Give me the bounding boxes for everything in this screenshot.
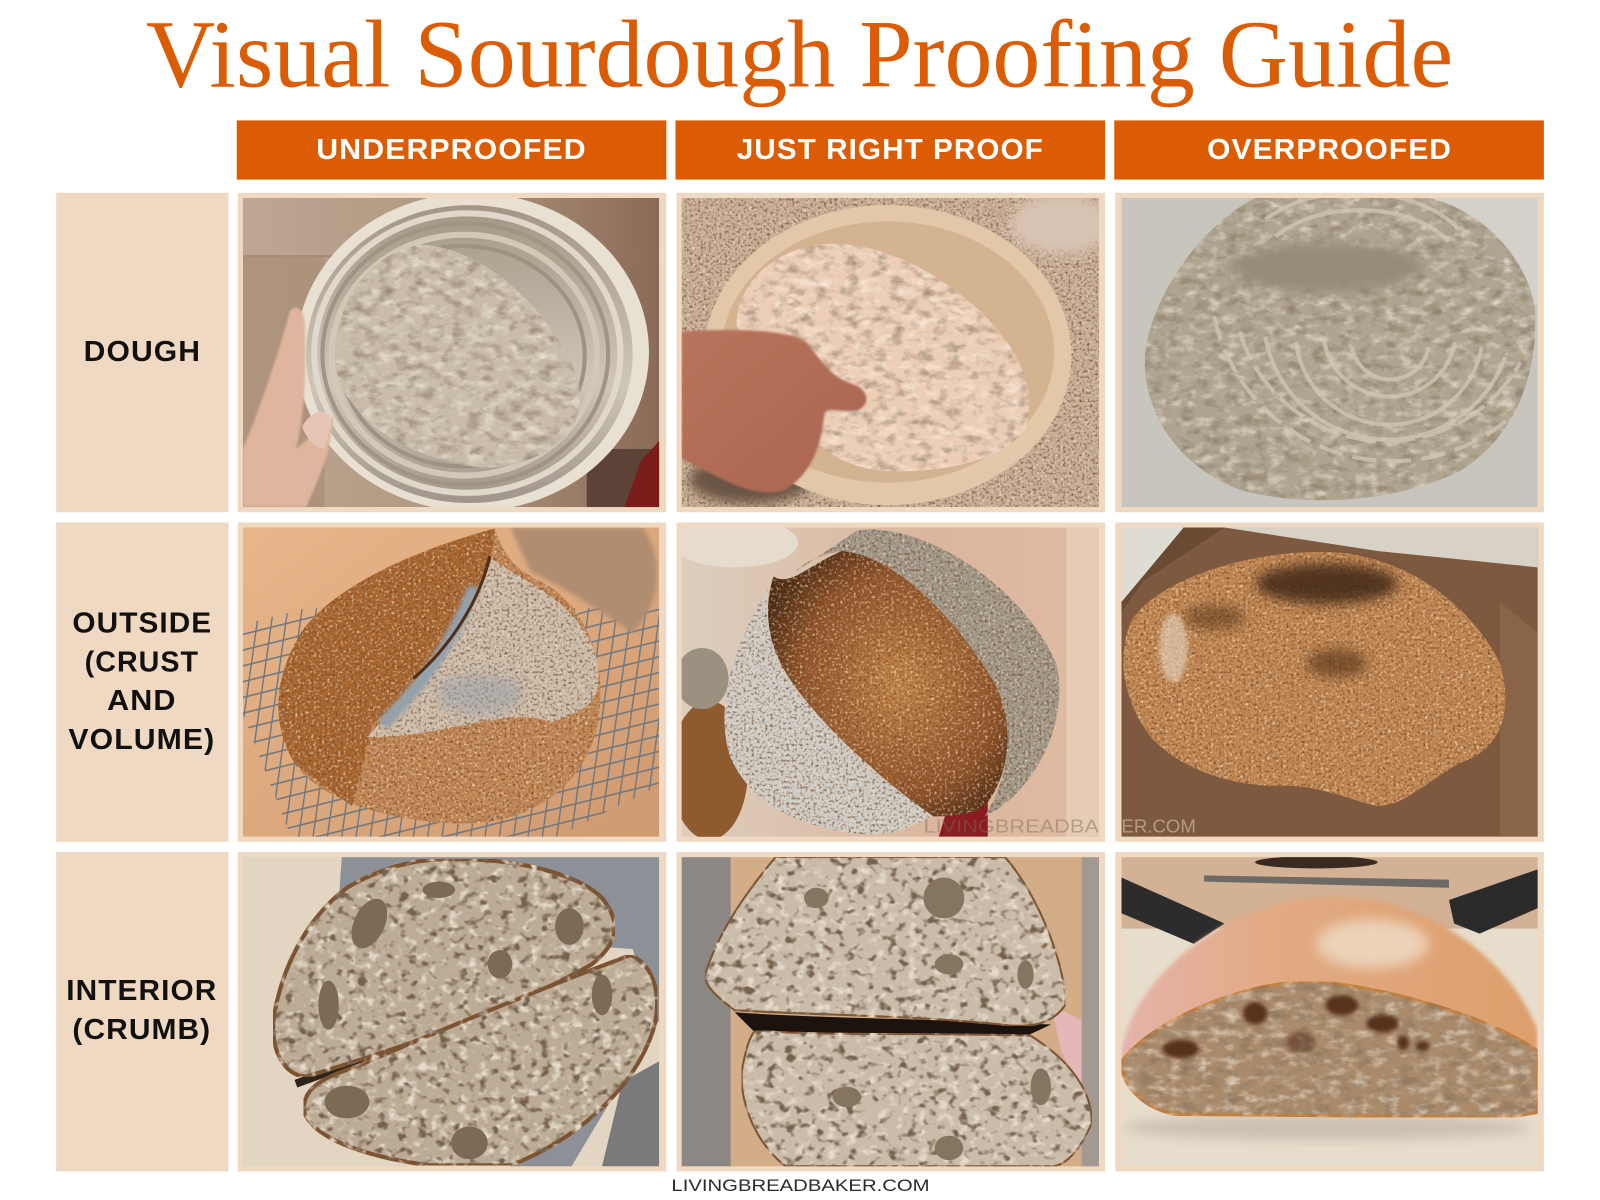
footer: website: LIVINGBREADBAKER.COM [671,1176,930,1195]
photo: underproofed loaf on rack [243,528,659,837]
row label: outside (crust and volume) [56,522,229,842]
photo: overproofed scored dough [1121,192,1538,507]
row label: outside (crust and volume): OUTSIDE [72,608,212,640]
row label: dough [56,193,229,512]
photo: just right crumb, two halves [682,857,1099,1166]
row label: outside (crust and volume): (CRUST [85,646,199,678]
photo frames [238,193,1544,1171]
title: Visual Sourdough Proofing Guide [146,1,1453,108]
watermark: LIVINGBREADBA [923,816,1099,837]
row label: interior (crumb): (CRUMB) [72,1014,211,1046]
header: just right proof [676,120,1105,180]
row label: outside (crust and volume): AND [107,685,177,717]
header: underproofed: UNDERPROOFED [316,134,587,166]
photo: just right dough poke test [682,194,1112,507]
header: overproofed: OVERPROOFED [1207,134,1452,166]
row label: interior (crumb) [56,852,229,1171]
photo: just right loaf, crust and ear [670,518,1099,840]
photo: underproofed dough in banneton [243,193,659,511]
photo: overproofed flat loaf on board [1121,528,1538,837]
header: just right proof: JUST RIGHT PROOF [737,134,1044,166]
header: overproofed [1114,120,1544,180]
header: underproofed [237,120,666,180]
column headers [237,120,1544,180]
row label: dough: DOUGH [84,336,201,368]
row label: outside (crust and volume): VOLUME) [68,724,215,756]
row label: interior (crumb): INTERIOR [66,975,217,1007]
photo: overproofed dense crumb [1121,856,1538,1166]
photo: overproofed flat loaf on board: ER.COM [1121,816,1196,837]
photo: underproofed crumb, two halves [243,857,659,1166]
